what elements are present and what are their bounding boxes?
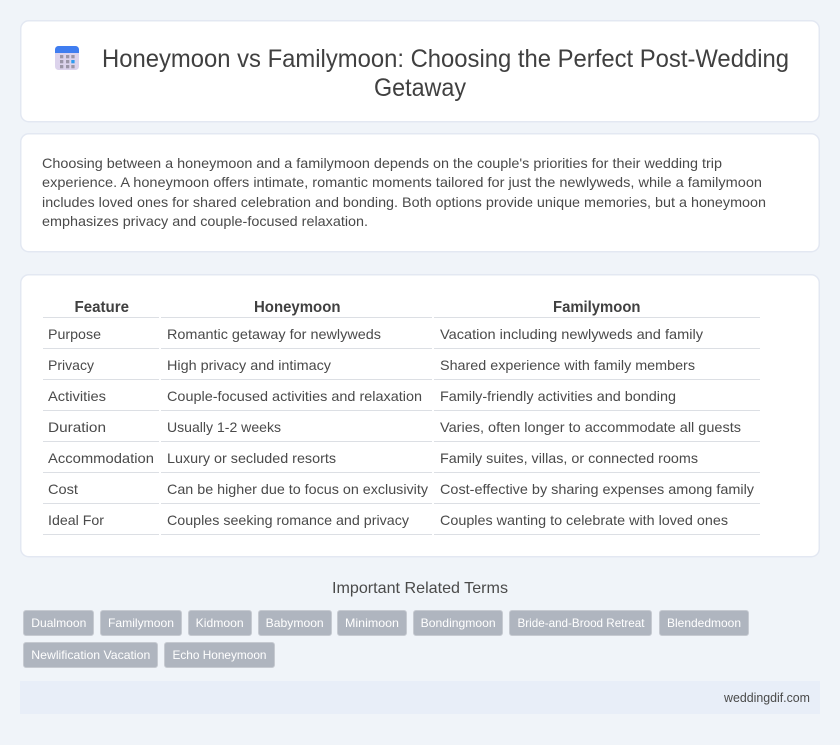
tag: newlification vacation: Newlification Vacation [31,648,150,662]
panel: title header [21,21,819,122]
tag: bondingmoon [414,610,502,636]
row: activities: Family-friendly activities and bonding [440,388,676,404]
title: Honeymoon vs Familymoon: Choosing the Perfect Post-Wedding [102,45,789,73]
row: privacy: High privacy and intimacy [167,357,331,373]
row: cost: Cost [48,481,78,497]
row: duration: Varies, often longer to accommodate all guests [440,419,741,435]
row: cost: Cost-effective by sharing expenses among family [440,481,754,497]
row: purpose: Purpose [48,326,101,342]
heading: important related terms: Important Related Terms [332,580,508,597]
introduction text: includes loved ones for shared celebration and bonding. Both options provide unique memories, but a honeymoon [42,194,766,210]
row: purpose: Romantic getaway for newlyweds [167,326,381,342]
tag: familymoon [100,610,182,636]
tag: dualmoon [24,610,94,636]
tag: familymoon: Familymoon [108,616,174,630]
row: accommodation [48,450,698,466]
tag: bride-and-brood retreat: Bride-and-Brood Retreat [518,616,645,630]
row: privacy: Privacy [48,357,94,373]
row: cost [48,481,754,497]
tag: blendedmoon [660,610,748,636]
row: privacy: Shared experience with family members [440,357,695,373]
tag: bride-and-brood retreat [510,610,652,636]
row: purpose: Vacation including newlyweds and family [440,326,703,342]
tag: echo honeymoon: Echo Honeymoon [172,648,266,662]
title [102,45,789,102]
panel: introduction [21,134,819,252]
row: duration [48,419,741,435]
tag: newlification vacation [24,642,158,668]
tag: minimoon: Minimoon [345,616,399,630]
row: purpose [48,326,703,342]
row: duration: Usually 1-2 weeks [167,419,281,435]
row: accommodation: Family suites, villas, or connected rooms [440,450,698,466]
related term tags [24,610,748,668]
row: activities [48,388,676,404]
tag: kidmoon: Kidmoon [196,616,244,630]
row: accommodation: Luxury or secluded resorts [167,450,336,466]
row: duration: Duration [48,419,106,435]
row: ideal for [48,512,728,528]
tag: dualmoon: Dualmoon [31,616,86,630]
introduction text: experience. A honeymoon offers intimate, romantic moments tailored for just the newlyweds, while a familymoon [42,174,762,190]
introduction text: Choosing between a honeymoon and a familymoon depends on the couple's priorities for their wedding trip [42,155,722,171]
panel: comparison table [21,275,819,557]
row: activities: Couple-focused activities and relaxation [167,388,422,404]
tag: blendedmoon: Blendedmoon [667,616,741,630]
title: Getaway [374,74,466,102]
icon: calendar [55,46,79,70]
row: ideal for: Couples wanting to celebrate with loved ones [440,512,728,528]
row: accommodation: Accommodation [48,450,154,466]
table header: Feature [74,299,129,316]
introduction text: emphasizes privacy and couple-focused relaxation. [42,213,368,229]
tag: babymoon: Babymoon [266,616,324,630]
footer bar [20,681,820,714]
tag: minimoon [338,610,406,636]
table header [74,299,640,316]
tag: bondingmoon: Bondingmoon [421,616,496,630]
table header: Familymoon [553,299,640,316]
footer source text: weddingdif.com [723,691,810,705]
row: cost: Can be higher due to focus on exclusivity [167,481,428,497]
tag: babymoon [258,610,332,636]
introduction text [42,155,766,229]
row: ideal for: Couples seeking romance and privacy [167,512,409,528]
tag: echo honeymoon [164,642,274,668]
row: activities: Activities [48,388,106,404]
table header: Honeymoon [254,299,340,316]
row: ideal for: Ideal For [48,512,104,528]
row: privacy [48,357,695,373]
tag: kidmoon [188,610,252,636]
